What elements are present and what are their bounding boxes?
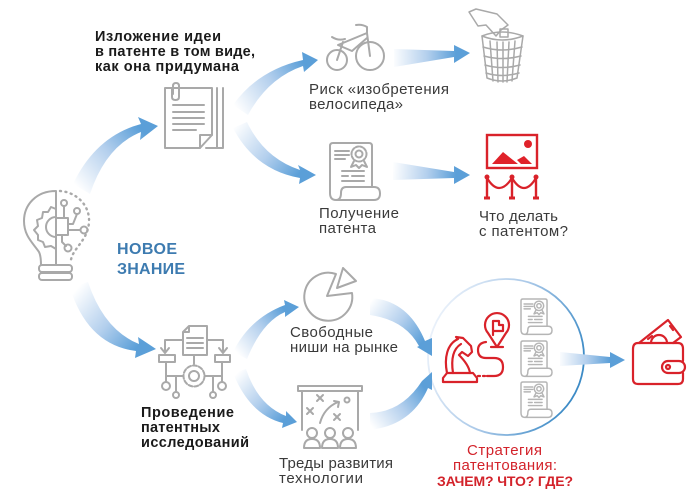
heading: patent research: патентных bbox=[141, 420, 220, 436]
heading: new knowledge: НОВОЕ bbox=[117, 241, 177, 258]
text: reinventing the wheel risk bbox=[309, 81, 449, 113]
text: technology trends: Треды развития bbox=[279, 455, 393, 472]
icon: patent research flow bbox=[159, 326, 230, 398]
text: getting a patent: Получение bbox=[319, 205, 399, 222]
arrow: idea to research bbox=[70, 282, 156, 358]
icon: bicycle bbox=[327, 25, 384, 70]
icon: wallet with banknote bbox=[633, 320, 685, 384]
heading: idea as invented: как она придумана bbox=[95, 59, 240, 75]
arrow: patent text to bicycle bbox=[233, 52, 318, 115]
text: what to do with the patent: с патентом? bbox=[479, 223, 568, 240]
text: free market niches bbox=[290, 324, 398, 356]
arrow: patent text to certificate bbox=[233, 122, 316, 184]
icon: patent certificate bbox=[330, 143, 380, 200]
heading: idea as invented: Изложение идеи bbox=[95, 29, 221, 45]
arrow: research to trends bbox=[233, 369, 297, 428]
arrow: free niches to strategy bbox=[370, 298, 432, 356]
text: free market niches: ниши на рынке bbox=[290, 339, 398, 356]
heading: patent research: исследований bbox=[141, 435, 249, 451]
icon: chess knight with route and map pin bbox=[443, 313, 509, 382]
heading: patent research bbox=[141, 405, 249, 451]
icon: strategy board with people bbox=[298, 386, 362, 448]
text: patenting strategy: Стратегия bbox=[467, 442, 542, 459]
heading: idea as invented: в патенте в том виде, bbox=[95, 44, 255, 60]
arrow: research to free niches bbox=[233, 300, 299, 359]
icon: pie chart bbox=[304, 268, 356, 321]
arrow: idea to patent text bbox=[73, 117, 158, 194]
text: patenting strategy bbox=[437, 442, 573, 489]
arrow: trends to strategy bbox=[370, 372, 432, 430]
heading: patent research: Проведение bbox=[141, 405, 234, 421]
icon: gallery picture on stanchions bbox=[484, 135, 539, 198]
text: reinventing the wheel risk: Риск «изобретения bbox=[309, 81, 449, 98]
text: patenting strategy: патентования: bbox=[453, 457, 557, 474]
arrow: strategy to wallet bbox=[560, 352, 625, 368]
icon: light bulb with gear and circuit bbox=[24, 191, 89, 280]
heading: new knowledge bbox=[117, 241, 185, 278]
text: technology trends bbox=[279, 455, 393, 487]
arrow: certificate to gallery bbox=[393, 162, 470, 184]
text: getting a patent bbox=[319, 205, 399, 237]
icon: trash basket with hand bbox=[469, 9, 523, 82]
circle: patenting strategy bbox=[428, 279, 584, 435]
icon: stapled document bbox=[165, 83, 223, 148]
text: what to do with the patent bbox=[479, 208, 568, 240]
text: patenting strategy: ЗАЧЕМ? ЧТО? ГДЕ? bbox=[437, 473, 573, 489]
text: what to do with the patent: Что делать bbox=[479, 208, 558, 225]
text: getting a patent: патента bbox=[319, 220, 377, 237]
text: reinventing the wheel risk: велосипеда» bbox=[309, 96, 403, 113]
icon: patent certificate one bbox=[521, 299, 552, 334]
text: technology trends: технологии bbox=[279, 470, 363, 487]
heading: new knowledge: ЗНАНИЕ bbox=[117, 261, 185, 278]
arrow: bicycle to trash bbox=[394, 45, 470, 67]
icon: patent certificate two bbox=[521, 341, 552, 376]
icon: patent certificate three bbox=[521, 382, 552, 417]
text: free market niches: Свободные bbox=[290, 324, 373, 341]
heading: idea as invented bbox=[95, 29, 255, 75]
